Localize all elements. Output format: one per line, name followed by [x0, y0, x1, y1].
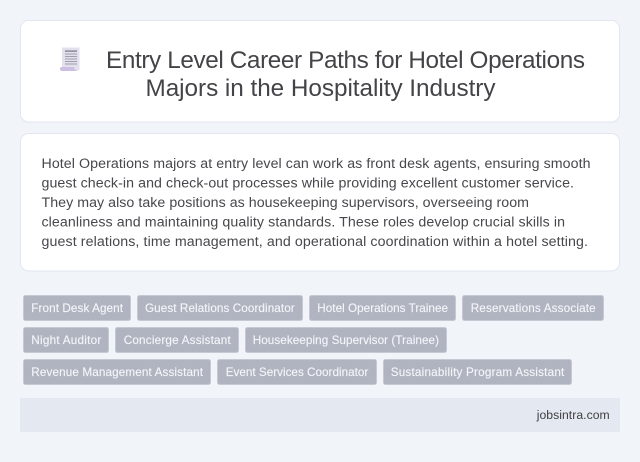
tag: Concierge Assistant [116, 328, 238, 352]
description text: guest relations, time management, and operational coordination within a hotel setting. [42, 234, 588, 250]
tag: Sustainability Program Assistant: Sustainability Program Assistant [391, 366, 565, 379]
title: Entry Level Career Paths for Hotel Operations [106, 47, 585, 74]
tag: Hotel Operations Trainee: Hotel Operations Trainee [317, 302, 448, 315]
panel: description card [20, 134, 620, 271]
tag list: job titles [24, 296, 604, 384]
tag: Night Auditor: Night Auditor [31, 334, 101, 347]
footer source text: jobsintra.com [536, 408, 610, 422]
description text [42, 156, 590, 250]
description text: cleanliness and maintaining quality standards. These roles develop crucial skills in [42, 214, 565, 230]
tag: Night Auditor [24, 328, 108, 352]
tag: Event Services Coordinator: Event Services Coordinator [226, 366, 368, 379]
tag: Concierge Assistant: Concierge Assistant [124, 334, 231, 347]
tag: Sustainability Program Assistant [384, 360, 572, 384]
tag: Reservations Associate: Reservations Associate [471, 302, 596, 315]
title [106, 47, 585, 102]
tag: Housekeeping Supervisor (Trainee) [246, 328, 446, 352]
tag: Guest Relations Coordinator: Guest Relations Coordinator [145, 302, 295, 315]
tag: Event Services Coordinator [218, 360, 376, 384]
tag: Reservations Associate [462, 296, 604, 320]
tag: Front Desk Agent [24, 296, 130, 320]
description text: Hotel Operations majors at entry level can work as front desk agents, ensuring smooth [42, 156, 590, 172]
tag: Housekeeping Supervisor (Trainee): Housekeeping Supervisor (Trainee) [253, 334, 439, 347]
footer bar [20, 398, 620, 432]
title: Majors in the Hospitality Industry [146, 75, 496, 102]
tag: Hotel Operations Trainee [310, 296, 456, 320]
tag: Revenue Management Assistant: Revenue Management Assistant [31, 366, 204, 379]
description text: They may also take positions as housekeeping supervisors, overseeing room [42, 195, 529, 211]
description text: guest check-in and check-out processes while providing excellent customer service. [42, 176, 574, 192]
tag: Guest Relations Coordinator [138, 296, 302, 320]
icon: document scroll [60, 48, 80, 71]
tag: Revenue Management Assistant [24, 360, 210, 384]
panel: title card [20, 20, 620, 122]
tag: Front Desk Agent: Front Desk Agent [31, 302, 124, 315]
